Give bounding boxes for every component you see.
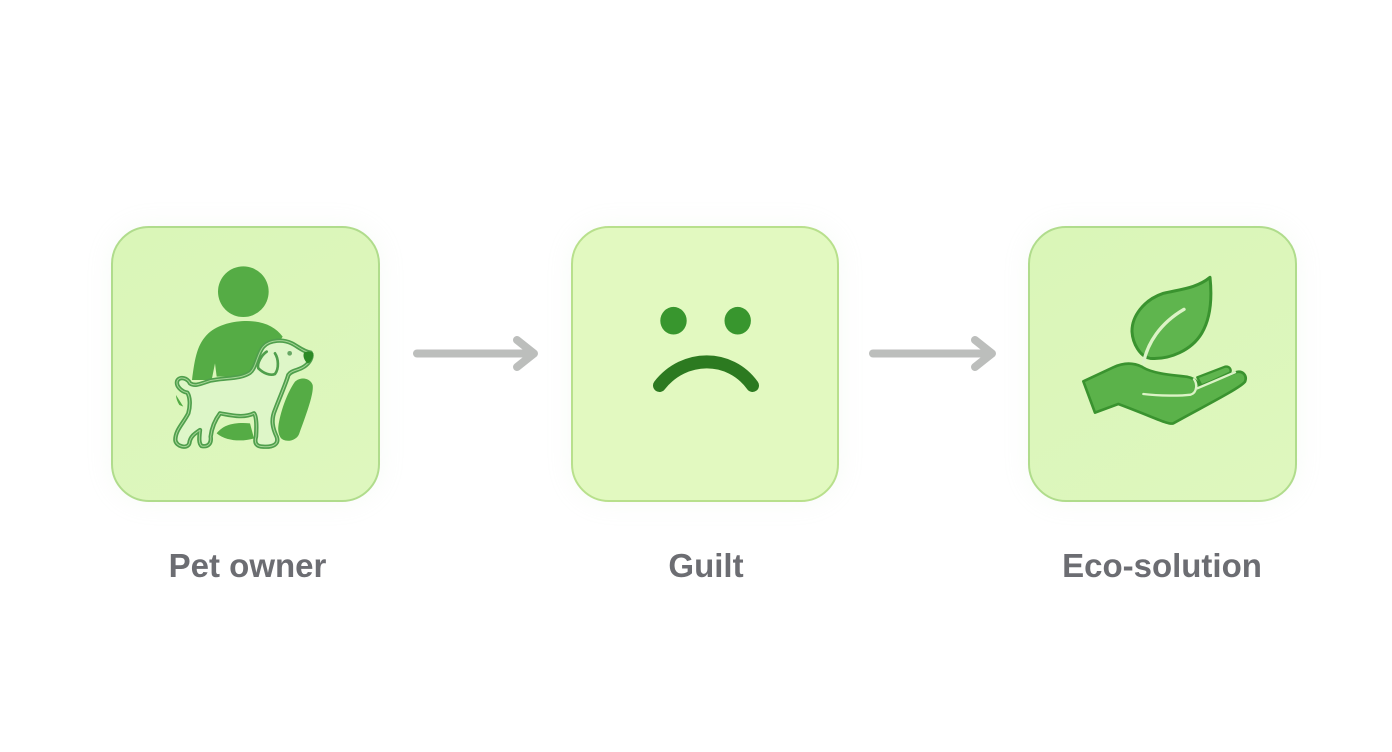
leaf <box>1132 277 1211 359</box>
dog ear <box>258 352 278 375</box>
panel: pet owner card <box>111 226 380 502</box>
leaf vein <box>1143 309 1184 363</box>
dog outline <box>175 341 312 447</box>
panel: eco-solution card <box>1028 226 1297 502</box>
dog <box>175 341 312 447</box>
hand <box>1083 364 1246 424</box>
frown <box>660 362 752 386</box>
icon: person with dog <box>175 266 313 447</box>
arrow: pet owner to guilt <box>417 340 534 367</box>
left eye <box>660 307 687 335</box>
dog eye <box>287 351 292 356</box>
right eye <box>724 307 751 335</box>
person head <box>218 266 269 317</box>
arrow: guilt to eco-solution <box>873 340 992 367</box>
dog outline highlight <box>175 341 312 447</box>
person leg <box>278 378 313 441</box>
icon: leaf in hand <box>1083 277 1246 424</box>
person body <box>192 321 283 380</box>
heading: guilt: Guilt <box>668 547 744 584</box>
heading: eco-solution: Eco-solution <box>1062 547 1262 584</box>
panel: guilt card <box>571 226 839 502</box>
dog nose <box>303 351 313 363</box>
hand highlight <box>1143 372 1235 396</box>
icon: sad face <box>660 307 752 386</box>
finger <box>1197 367 1231 386</box>
person lower body <box>176 395 254 440</box>
heading: pet owner: Pet owner <box>169 547 326 584</box>
